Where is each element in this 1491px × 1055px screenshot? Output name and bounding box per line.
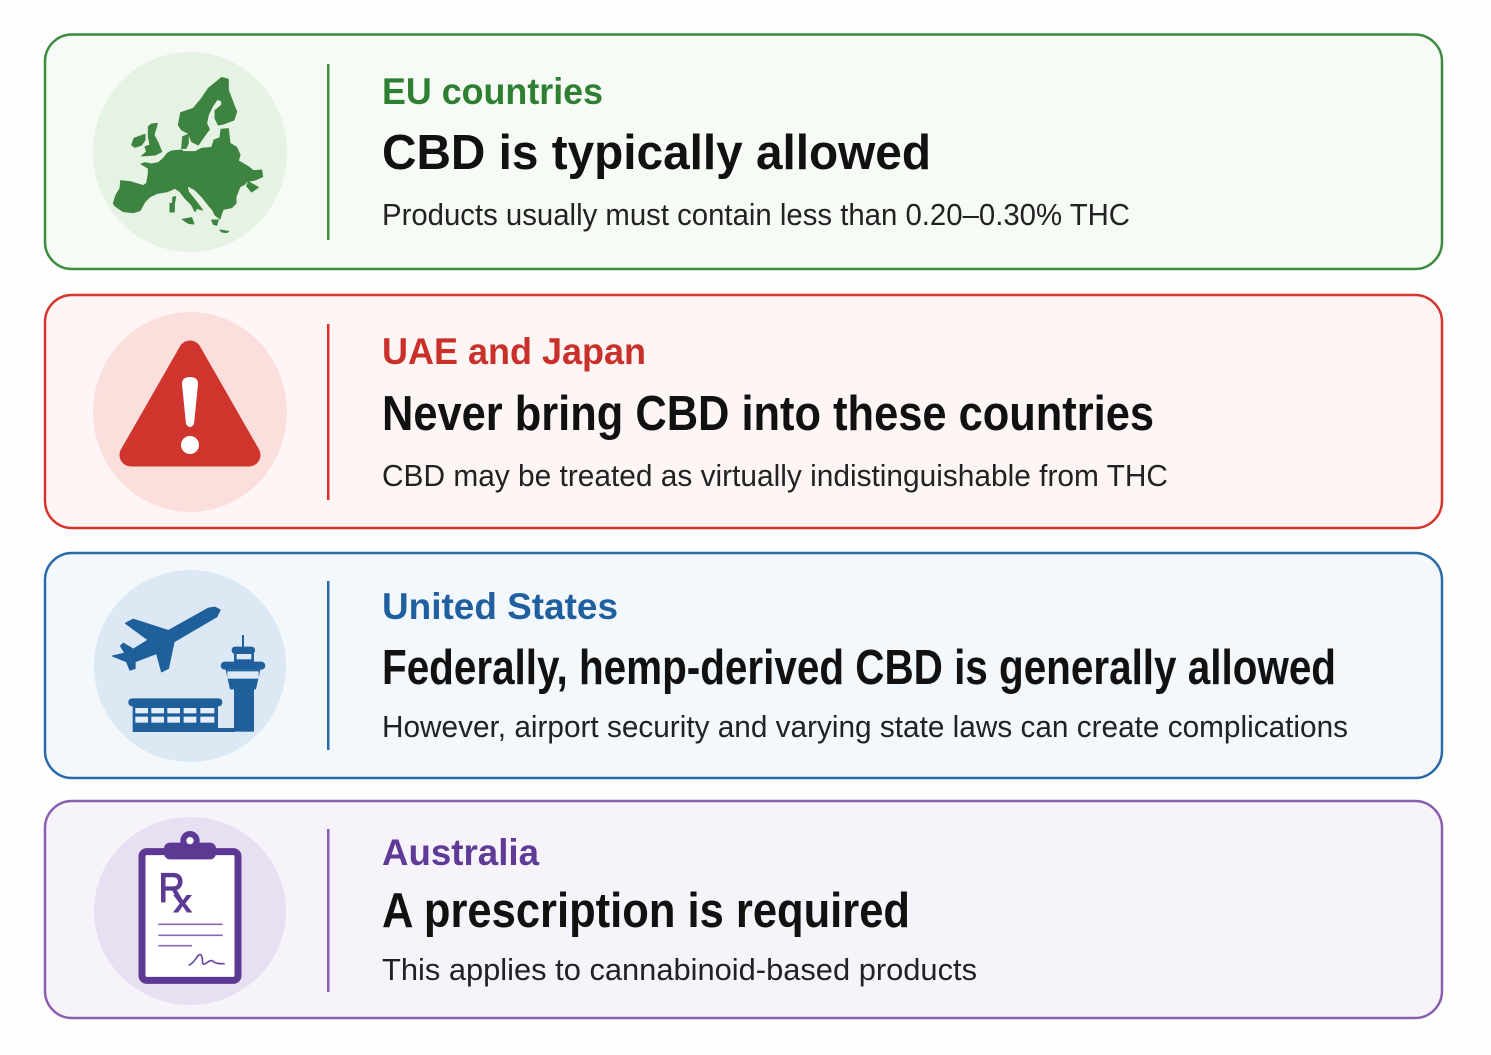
divider (327, 64, 330, 240)
panel: EU countries (45, 34, 1442, 269)
description: airport complications: However, airport security and varying state laws can create complications (382, 709, 1348, 744)
heading: prescription required: A prescription is required (382, 884, 910, 938)
icon: prescription clipboard: R (159, 865, 185, 911)
description: THC limit: Products usually must contain less than 0.20–0.30% THC (382, 197, 1130, 232)
label: EU countries: EU countries (382, 71, 603, 112)
panel: UAE and Japan (45, 295, 1442, 528)
description: cannabinoid products: This applies to cannabinoid-based products (382, 952, 977, 987)
icon: warning triangle (93, 312, 287, 512)
icon: plane and airport (94, 570, 286, 762)
divider (327, 581, 330, 750)
icon: map of Europe (93, 52, 287, 252)
panel: United States (45, 553, 1442, 778)
description: CBD treated like THC: CBD may be treated as virtually indistinguishable from THC (382, 458, 1168, 493)
icon: prescription clipboard (94, 817, 286, 1005)
panel: Australia (45, 801, 1442, 1018)
label: UAE and Japan: UAE and Japan (382, 331, 646, 372)
icon: prescription clipboard: x (173, 884, 193, 921)
label: United States: United States (382, 586, 618, 627)
label: Australia: Australia (382, 832, 539, 873)
heading: CBD is typically allowed: CBD is typically allowed (382, 126, 931, 180)
heading: Never bring CBD: Never bring CBD into these countries (382, 387, 1154, 441)
divider (327, 324, 330, 500)
divider (327, 829, 330, 992)
